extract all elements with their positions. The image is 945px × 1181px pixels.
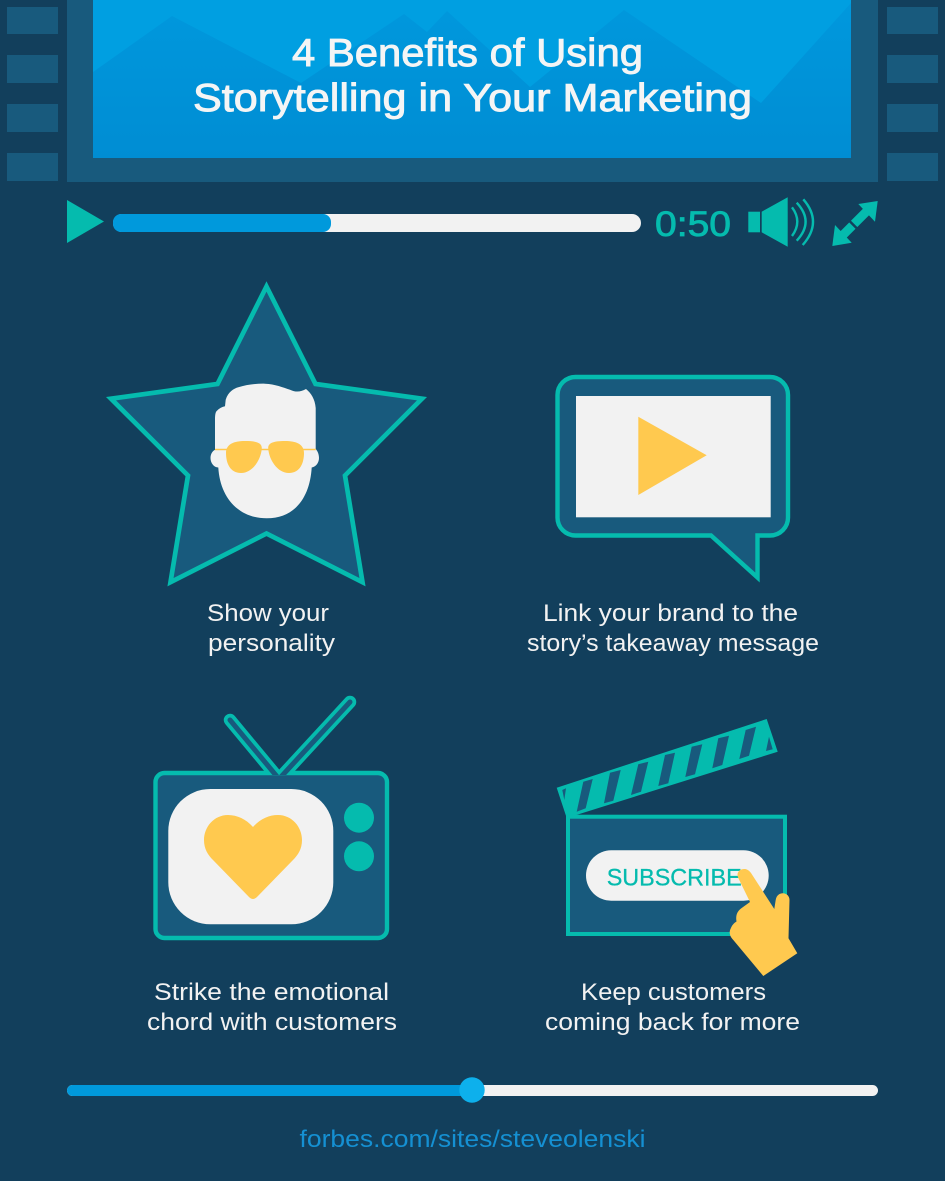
time readout: 0:50 (655, 205, 731, 244)
video screen (576, 396, 771, 517)
caption (545, 979, 800, 1036)
icon: pointing hand (730, 869, 797, 976)
caption: chord with customers (147, 1009, 397, 1036)
icon: clapper board (568, 817, 785, 934)
progress bar (113, 214, 641, 232)
icon: speech bubble (557, 377, 788, 578)
film strip perforations: left (7, 7, 58, 181)
caption: story’s takeaway message (527, 630, 819, 657)
title: 4 Benefits of Using (292, 32, 643, 75)
screen with mountains (93, 0, 851, 158)
caption: Link your brand to the (543, 600, 798, 627)
tv knobs (344, 803, 374, 871)
caption (147, 979, 397, 1036)
icon: star (111, 286, 422, 582)
caption (207, 600, 335, 657)
panel: emotional chord (147, 702, 397, 1036)
icon: speaker (748, 197, 813, 247)
tv screen (168, 789, 333, 924)
icon: play button (67, 200, 104, 243)
caption: Show your (207, 600, 329, 627)
icon: yellow play triangle (638, 417, 707, 495)
player controls (67, 197, 878, 247)
caption: Strike the emotional (154, 979, 389, 1006)
caption: coming back for more (545, 1009, 800, 1036)
caption: personality (208, 630, 335, 657)
video frame (67, 0, 878, 182)
source url: forbes.com/sites/steveolenski (300, 1126, 646, 1153)
icon: clapper top (557, 719, 778, 818)
caption (527, 600, 819, 657)
icon: heart (204, 815, 302, 899)
subscribe button (586, 850, 769, 901)
panel: link your brand (527, 377, 819, 657)
caption: Keep customers (581, 979, 766, 1006)
panel: subscribe (545, 719, 800, 1036)
icon: head with sunglasses (210, 384, 319, 518)
icon: tv body (156, 773, 387, 938)
film strip perforations: right (887, 7, 938, 181)
title (193, 32, 752, 120)
subscribe button: SUBSCRIBE (607, 865, 742, 892)
title: Storytelling in Your Marketing (193, 77, 752, 120)
icon: fullscreen arrow (832, 201, 878, 246)
panel: show your personality (111, 286, 422, 657)
bottom slider (67, 1077, 878, 1103)
icon: tv antennas (230, 702, 350, 779)
